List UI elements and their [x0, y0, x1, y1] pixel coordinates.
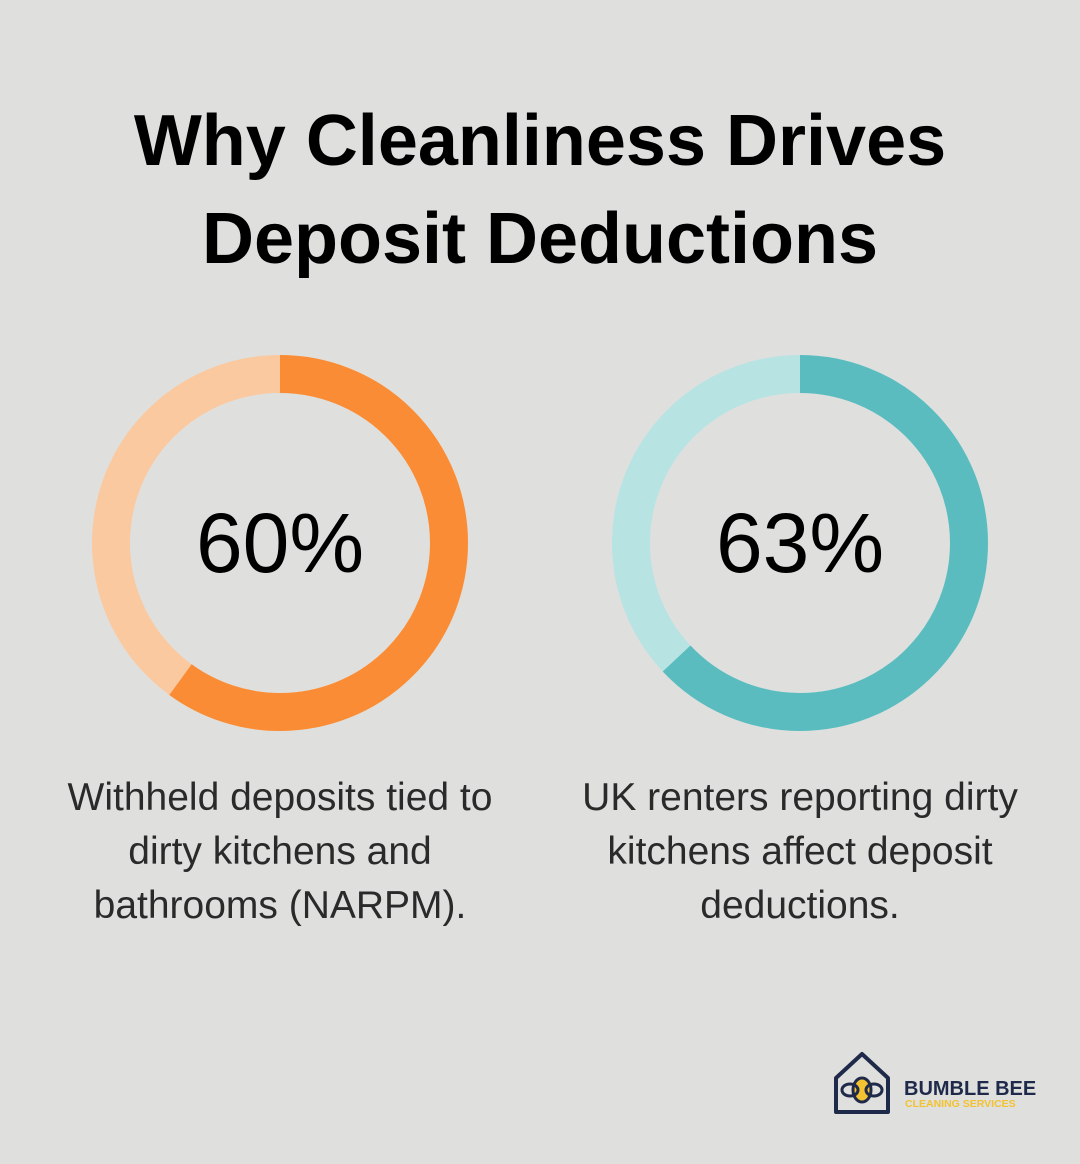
donut: 63%: 63% — [716, 496, 884, 590]
donut: 60%: 60% — [196, 496, 364, 590]
logo: CLEANING SERVICES — [905, 1098, 1016, 1110]
caption right: kitchens affect deposit — [607, 830, 993, 873]
caption left: bathrooms (NARPM). — [94, 884, 466, 927]
caption left: dirty kitchens and — [128, 830, 432, 873]
logo: BUMBLE BEE — [904, 1078, 1036, 1100]
title: Deposit Deductions — [202, 199, 878, 279]
caption right — [582, 776, 1018, 927]
title — [134, 101, 946, 279]
logo — [834, 1052, 1036, 1114]
caption right: deductions. — [700, 884, 900, 927]
donut: 63% — [612, 355, 988, 731]
caption left: Withheld deposits tied to — [68, 776, 492, 819]
donut: 60% — [92, 355, 468, 731]
title: Why Cleanliness Drives — [134, 101, 946, 181]
caption right: UK renters reporting dirty — [582, 776, 1018, 819]
caption left — [68, 776, 492, 927]
